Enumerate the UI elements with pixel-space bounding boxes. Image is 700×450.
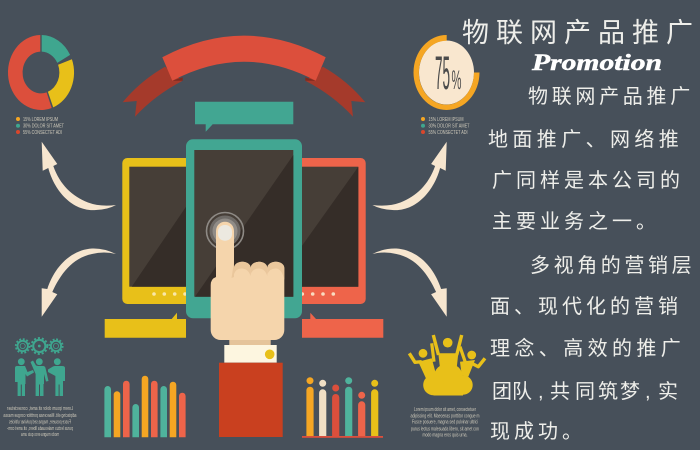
touch ripple <box>206 212 244 250</box>
arrow: lower left <box>42 248 116 317</box>
arrow: lower right <box>372 248 447 317</box>
body paragraph one: 物联网产品推广 <box>528 85 694 108</box>
bar chart left <box>104 376 186 437</box>
paragraph right: purus lectus malesuada libero, sit amet con <box>411 426 479 432</box>
body paragraph two <box>490 254 695 443</box>
icon: team celebrating on cloud <box>409 335 485 396</box>
arrow: upper left <box>42 142 116 210</box>
paragraph right: adipiscing elit. Maecenas porttitor congue m <box>410 413 480 419</box>
donut legend: 55% CONSECTET ADI <box>23 130 62 136</box>
body paragraph two: 面、现代化的营销 <box>490 295 682 318</box>
paragraph right: modo magna eros quis urna. <box>422 433 468 439</box>
yellow tablet <box>122 158 202 304</box>
body paragraph one: 广同样是本公司的 <box>492 169 684 192</box>
paragraph right: Fusce posuere, magna sed pulvinar ultrici <box>412 420 478 426</box>
body paragraph one: 地面推广、网络推 <box>488 128 683 151</box>
gauge legend <box>421 117 470 136</box>
donut legend: 15% LOREM IPSUM <box>23 117 58 123</box>
donut chart <box>8 35 74 110</box>
body paragraph two: 团队,共同筑梦,实 <box>492 380 678 403</box>
gauge legend: 15% LOREM IPSUM <box>428 117 464 123</box>
mirrored paragraph left <box>4 406 76 438</box>
gauge legend: 55% CONSECTET ADI <box>428 130 468 136</box>
subtitle: Promotion: Promotion <box>531 50 662 75</box>
body paragraph two: 多视角的营销层 <box>530 254 695 277</box>
gauge 75 percent <box>414 35 480 110</box>
body paragraph one: 主要业务之一。 <box>492 210 660 233</box>
teal speech bubble <box>195 102 293 132</box>
lollipop chart <box>302 377 383 438</box>
teal tablet <box>186 139 302 318</box>
donut legend <box>16 117 64 136</box>
hand pointing <box>211 222 284 345</box>
red tablet <box>286 158 366 304</box>
body paragraph two: 理念、高效的推广 <box>490 336 685 360</box>
sleeve <box>219 363 283 437</box>
ribbon banner <box>123 36 365 117</box>
red label <box>302 313 383 338</box>
body paragraph one <box>488 85 694 233</box>
gauge 75 percent: 75 <box>435 47 450 100</box>
icon: team with gears <box>15 338 65 396</box>
paragraph right: Lorem ipsum dolor sit amet, consectetuer <box>414 407 476 413</box>
gauge 75 percent: % <box>452 65 461 96</box>
title: 物联网产品推广 <box>462 18 700 48</box>
shirt cuff and button <box>224 345 277 363</box>
yellow label <box>105 313 186 338</box>
paragraph right <box>410 407 480 439</box>
arrow: upper right <box>372 142 447 210</box>
donut legend: 30% DOLOR SIT AMET <box>23 124 64 130</box>
body paragraph two: 现成功。 <box>490 420 586 443</box>
gauge legend: 30% DOLOR SIT AMET <box>428 124 470 130</box>
